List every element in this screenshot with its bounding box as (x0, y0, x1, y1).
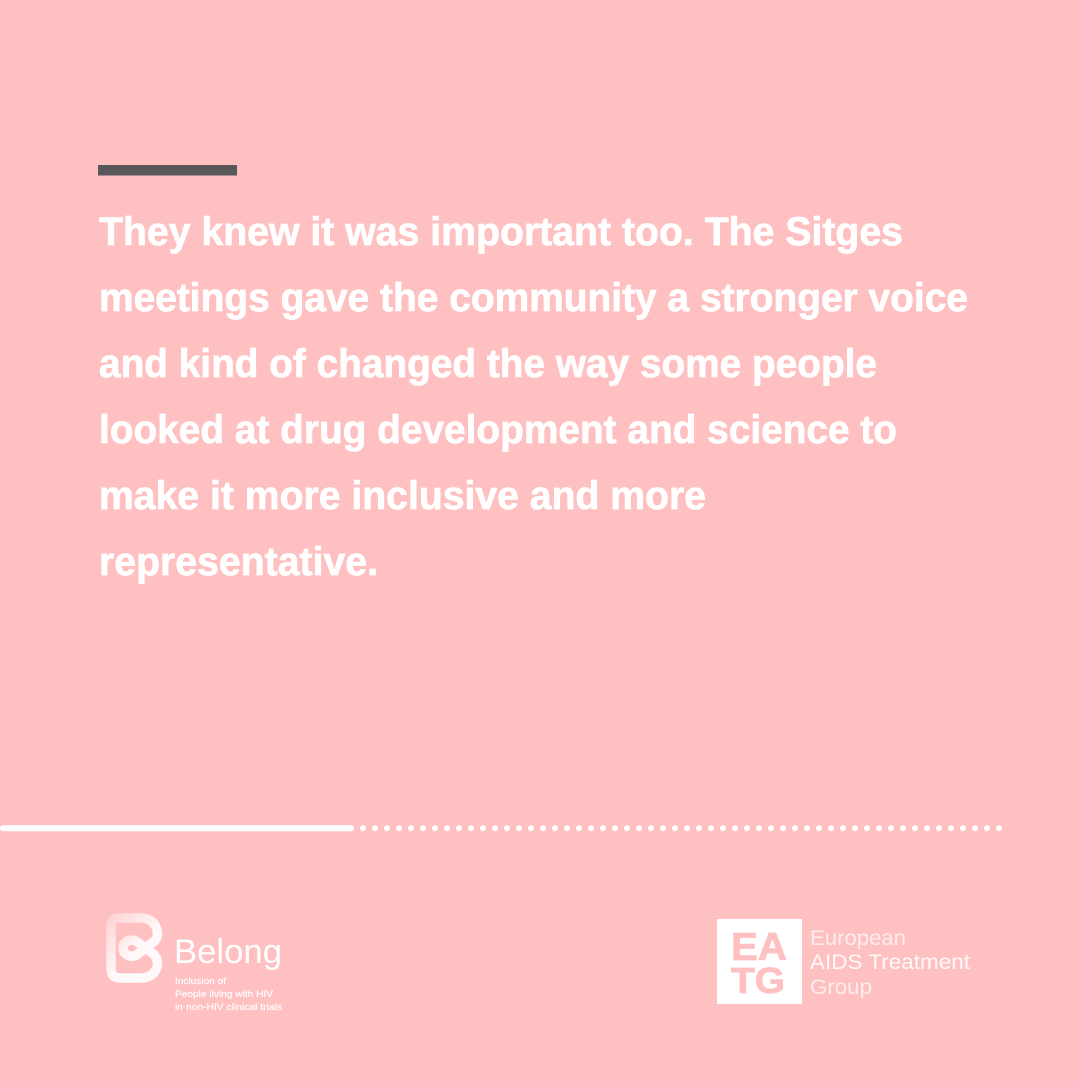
logo: Belong (111, 918, 282, 1013)
quote text: make it more inclusive and more (99, 474, 706, 518)
quote text: They knew it was important too. The Sitges (99, 210, 903, 254)
badge letters (731, 926, 787, 1001)
badge (717, 919, 802, 1004)
quote text: and kind of changed the way some people (99, 342, 877, 386)
organisation name (810, 927, 970, 999)
organisation name: AIDS Treatment (810, 951, 970, 974)
progress line (0, 825, 1001, 831)
tagline: People living with HIV (175, 989, 274, 1000)
badge letters: TG (731, 960, 785, 1001)
quote text: looked at drug development and science to (99, 408, 897, 452)
organisation name: Group (810, 976, 872, 999)
tagline: in non-HIV clinical trials (175, 1002, 282, 1013)
wordmark: Belong (174, 933, 282, 971)
organisation name: European (810, 927, 906, 950)
tagline: Inclusion of (175, 976, 226, 987)
icon: Belong mark (111, 918, 157, 978)
quote text: meetings gave the community a stronger voice (99, 276, 968, 320)
logo: EATG (717, 919, 970, 1004)
quote text: representative. (99, 540, 378, 584)
tagline (175, 976, 282, 1013)
badge letters: EA (731, 926, 787, 969)
quote text (99, 210, 968, 584)
accent bar (98, 165, 237, 176)
